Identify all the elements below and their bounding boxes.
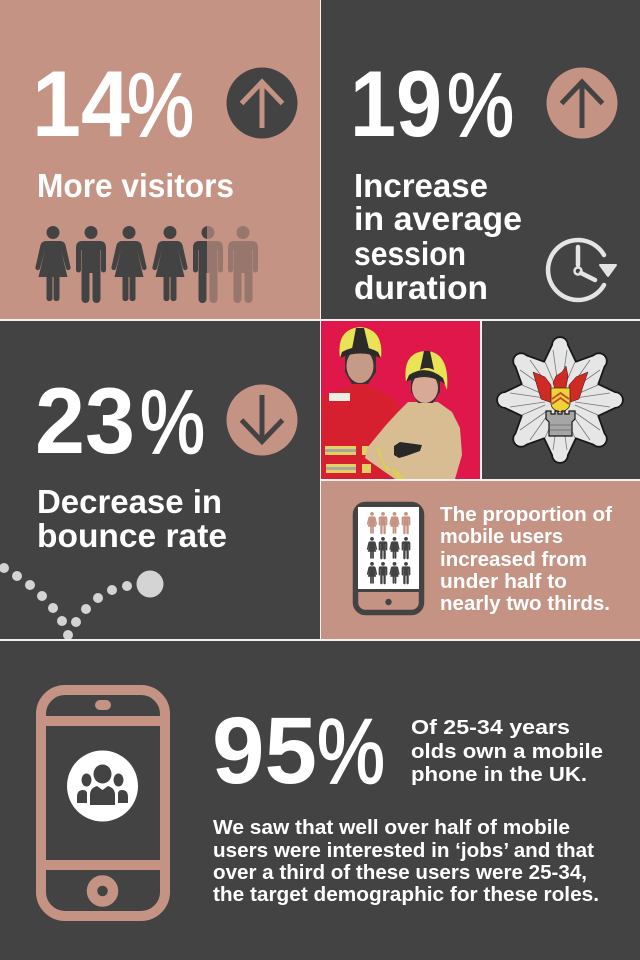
icon: small phone with people xyxy=(355,504,422,612)
panel: 95 percent own a phone xyxy=(0,641,640,960)
stat: 19% xyxy=(350,51,514,156)
label: increase in average session duration xyxy=(354,167,522,306)
label: increase in average session duration: duration xyxy=(354,269,488,306)
label: decrease in bounce rate xyxy=(37,483,227,554)
text: proportion of mobile users xyxy=(440,504,612,615)
people: dark rows xyxy=(367,537,410,584)
stat: 23%: % xyxy=(140,373,205,473)
icon: up arrow xyxy=(226,68,298,138)
text: jobs interest: over a third of these users were 25-34, xyxy=(213,862,587,884)
stat: 19%: % xyxy=(447,56,514,156)
panel: session duration xyxy=(321,0,640,319)
label: decrease in bounce rate: bounce rate xyxy=(37,517,227,554)
panel: mobile users xyxy=(321,481,640,639)
panel: bounce rate xyxy=(0,321,320,640)
text: of 25-34 year olds: phone in the UK. xyxy=(411,764,587,786)
text: jobs interest: users were interested in ‘jobs’ and that xyxy=(213,840,594,862)
stat: 14%: % xyxy=(127,56,194,156)
icon: down arrow xyxy=(226,384,298,456)
text: of 25-34 year olds: Of 25-34 years xyxy=(411,717,570,739)
crest: eight-point star xyxy=(498,338,622,462)
label: increase in average session duration: session xyxy=(354,235,466,272)
panel: more visitors xyxy=(0,0,320,319)
firefighter: man in red xyxy=(321,327,404,479)
text: proportion of mobile users: increased from xyxy=(440,549,587,571)
stat: 14%: 14 xyxy=(32,51,130,156)
text: jobs interest: We saw that well over half of mobile xyxy=(213,817,570,839)
stat: 95%: 95 xyxy=(212,698,317,804)
label: decrease in bounce rate: Decrease in xyxy=(37,483,222,520)
firefighter: woman in tan xyxy=(365,351,462,479)
icon: people in circle xyxy=(67,750,138,822)
stat: 95% xyxy=(212,698,385,804)
text: proportion of mobile users: The proportion of xyxy=(440,504,612,526)
label: increase in average session duration: in average xyxy=(354,200,522,237)
crest: stone tower xyxy=(546,411,575,436)
icon: clock xyxy=(548,240,616,300)
people: salmon row xyxy=(367,512,410,534)
photo: two firefighters xyxy=(321,321,480,479)
text: of 25-34 year olds: olds own a mobile xyxy=(411,741,603,763)
crest: red dragon xyxy=(533,366,588,403)
stat: 19%: 19 xyxy=(350,51,442,156)
graphic: bouncing dots xyxy=(0,563,164,640)
icon: up arrow xyxy=(546,68,618,138)
stat: 23%: 23 xyxy=(35,368,135,473)
text: proportion of mobile users: under half to xyxy=(440,571,567,593)
text: jobs interest xyxy=(213,817,599,906)
icon: large phone xyxy=(41,690,165,916)
text: of 25-34 year olds xyxy=(411,717,603,786)
label: increase in average session duration: Increase xyxy=(354,167,488,204)
text: proportion of mobile users: mobile users xyxy=(440,526,563,548)
stat: 14% xyxy=(32,51,194,156)
stat: 23% xyxy=(35,368,205,473)
crest: yellow shield xyxy=(551,388,570,412)
stat: 95%: % xyxy=(317,701,385,803)
pictogram: six people xyxy=(35,226,258,303)
label: more visitors: More visitors xyxy=(37,167,234,204)
text: jobs interest: the target demographic for these roles. xyxy=(213,884,599,906)
panel: fire service crest xyxy=(482,321,640,479)
text: proportion of mobile users: nearly two thirds. xyxy=(440,593,610,615)
